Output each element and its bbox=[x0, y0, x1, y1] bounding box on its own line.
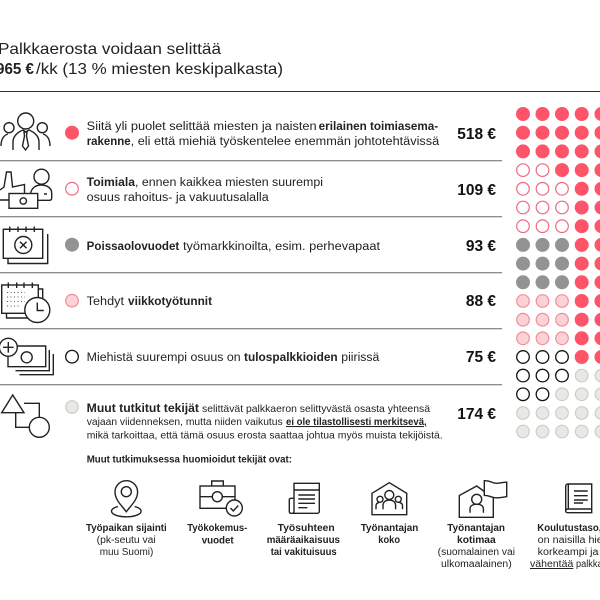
panel: rakenne row bbox=[1, 113, 496, 150]
text: rakenne: erilainen toimiasema- bbox=[319, 121, 438, 133]
text: rakenne: , eli että miehiä työskentelee enemmän johtotehtävissä bbox=[131, 136, 440, 148]
text: viikkotyötunnit bbox=[87, 296, 212, 308]
icon: people with tie bbox=[1, 113, 50, 150]
text: education: vähentää bbox=[530, 559, 574, 570]
legend dot: black outline bbox=[66, 350, 78, 363]
text: tulospalkkiot bbox=[87, 352, 380, 364]
text: rakenne: Siitä yli puolet selittää miesten ja naisten bbox=[87, 121, 317, 133]
value: 174 € bbox=[457, 406, 496, 423]
panel: employer home country bbox=[438, 481, 515, 570]
text: employer home country: kotimaa bbox=[457, 535, 496, 546]
icon: book bbox=[566, 484, 592, 513]
icon: factory and person bbox=[0, 169, 52, 208]
heading: other factors: Muut tutkimuksessa huomioidut tekijät ovat: bbox=[87, 454, 292, 466]
text: work experience bbox=[187, 523, 247, 546]
panel: poissaolovuodet row bbox=[3, 226, 496, 264]
value: 75 € bbox=[466, 349, 496, 366]
icon: map pin bbox=[112, 481, 141, 517]
title bbox=[0, 41, 283, 78]
legend dot: pink bbox=[66, 294, 78, 307]
icon: document bbox=[289, 483, 319, 513]
text: muut tekijät: ei ole tilastollisesti merkitsevä, bbox=[286, 416, 427, 428]
text: muut tekijät bbox=[87, 403, 443, 442]
text: toimiala: , ennen kaikkea miesten suurempi bbox=[135, 177, 323, 189]
text: workplace location: (pk-seutu vai bbox=[97, 535, 156, 546]
text: workplace location: muu Suomi) bbox=[100, 547, 153, 558]
text: tulospalkkiot: piirissä bbox=[341, 352, 380, 364]
icon: house with person and flag bbox=[459, 481, 507, 517]
value: 88 € bbox=[466, 293, 496, 310]
panel: workplace location bbox=[86, 481, 167, 558]
legend dot: hollow red bbox=[66, 182, 78, 195]
panel: employment type bbox=[267, 483, 340, 558]
text: workplace location bbox=[86, 523, 167, 558]
title: /kk (13 % miesten keskipalkasta) bbox=[36, 61, 283, 78]
panel: education bbox=[530, 484, 600, 570]
icon: calendar with clock bbox=[2, 282, 50, 322]
text: tulospalkkiot: tulospalkkioiden bbox=[244, 352, 338, 364]
text: employer home country: (suomalainen vai bbox=[438, 547, 515, 558]
text: work experience: Työkokemus- bbox=[187, 523, 247, 534]
text: poissaolovuodet bbox=[87, 241, 381, 253]
text: viikkotyötunnit: viikkotyötunnit bbox=[128, 296, 212, 308]
icon: house with three people bbox=[372, 483, 407, 515]
text: poissaolovuodet: työmarkkinoilta, esim. perhevapaat bbox=[183, 241, 381, 253]
text: muut tekijät: Muut tutkitut tekijät bbox=[87, 403, 199, 415]
legend dot: grey bbox=[65, 238, 79, 252]
text: education bbox=[530, 523, 600, 570]
value: 109 € bbox=[457, 182, 496, 199]
text: rakenne: rakenne bbox=[87, 136, 131, 148]
text: employer home country: Työnantajan bbox=[447, 523, 505, 534]
panel: muut tekijät row bbox=[2, 395, 496, 442]
title: Palkkaerosta voidaan selittää bbox=[0, 41, 221, 58]
panel: viikkotyötunnit row bbox=[2, 282, 496, 322]
text: toimiala: Toimiala bbox=[87, 177, 136, 189]
value: 93 € bbox=[466, 238, 496, 255]
panel: toimiala row bbox=[0, 169, 496, 208]
text: employment type bbox=[267, 523, 340, 558]
text: toimiala bbox=[87, 177, 323, 204]
text: muut tekijät: selittävät palkkaeron selittyvästä osasta yhteensä bbox=[202, 403, 430, 415]
legend dot: light grey bbox=[66, 401, 78, 413]
text: employer size: Työnantajan bbox=[361, 523, 418, 534]
text: employment type: tai vakituisuus bbox=[271, 547, 337, 558]
panel: work experience bbox=[187, 481, 247, 546]
text: tulospalkkiot: Miehistä suurempi osuus on bbox=[87, 352, 241, 364]
text: employer home country: ulkomaalainen) bbox=[441, 559, 512, 570]
text: poissaolovuodet: Poissaolovuodet bbox=[87, 241, 179, 253]
icon: briefcase with check bbox=[200, 481, 242, 516]
text: employment type: Työsuhteen bbox=[278, 523, 335, 534]
panel: employer size bbox=[361, 483, 418, 546]
text: toimiala: osuus rahoitus- ja vakuutusalalla bbox=[87, 192, 269, 204]
panel: tulospalkkiot row bbox=[0, 338, 496, 375]
icon: calendar with cross bbox=[3, 226, 48, 264]
text: employer home country bbox=[438, 523, 515, 570]
dot grid bbox=[516, 107, 600, 438]
text: employment type: määräaikaisuus bbox=[267, 535, 340, 546]
icon: banknotes with plus bbox=[0, 338, 53, 375]
text: muut tekijät: vajaan viidenneksen, mutta niiden vaikutus bbox=[87, 416, 283, 428]
text: employer size bbox=[361, 523, 418, 546]
text: rakenne bbox=[87, 121, 440, 148]
text: workplace location: Työpaikan sijainti bbox=[86, 523, 167, 534]
text: employer size: koko bbox=[378, 535, 400, 546]
text: work experience: vuodet bbox=[202, 536, 234, 546]
legend dot: red bbox=[65, 126, 79, 140]
text: muut tekijät: mikä tarkoittaa, että tämä osuus erosta saattaa johtua myös muista tekijöistä. bbox=[87, 430, 443, 442]
icon: shapes bbox=[2, 395, 49, 437]
text: viikkotyötunnit: Tehdyt bbox=[87, 296, 125, 308]
value: 518 € bbox=[457, 126, 496, 143]
